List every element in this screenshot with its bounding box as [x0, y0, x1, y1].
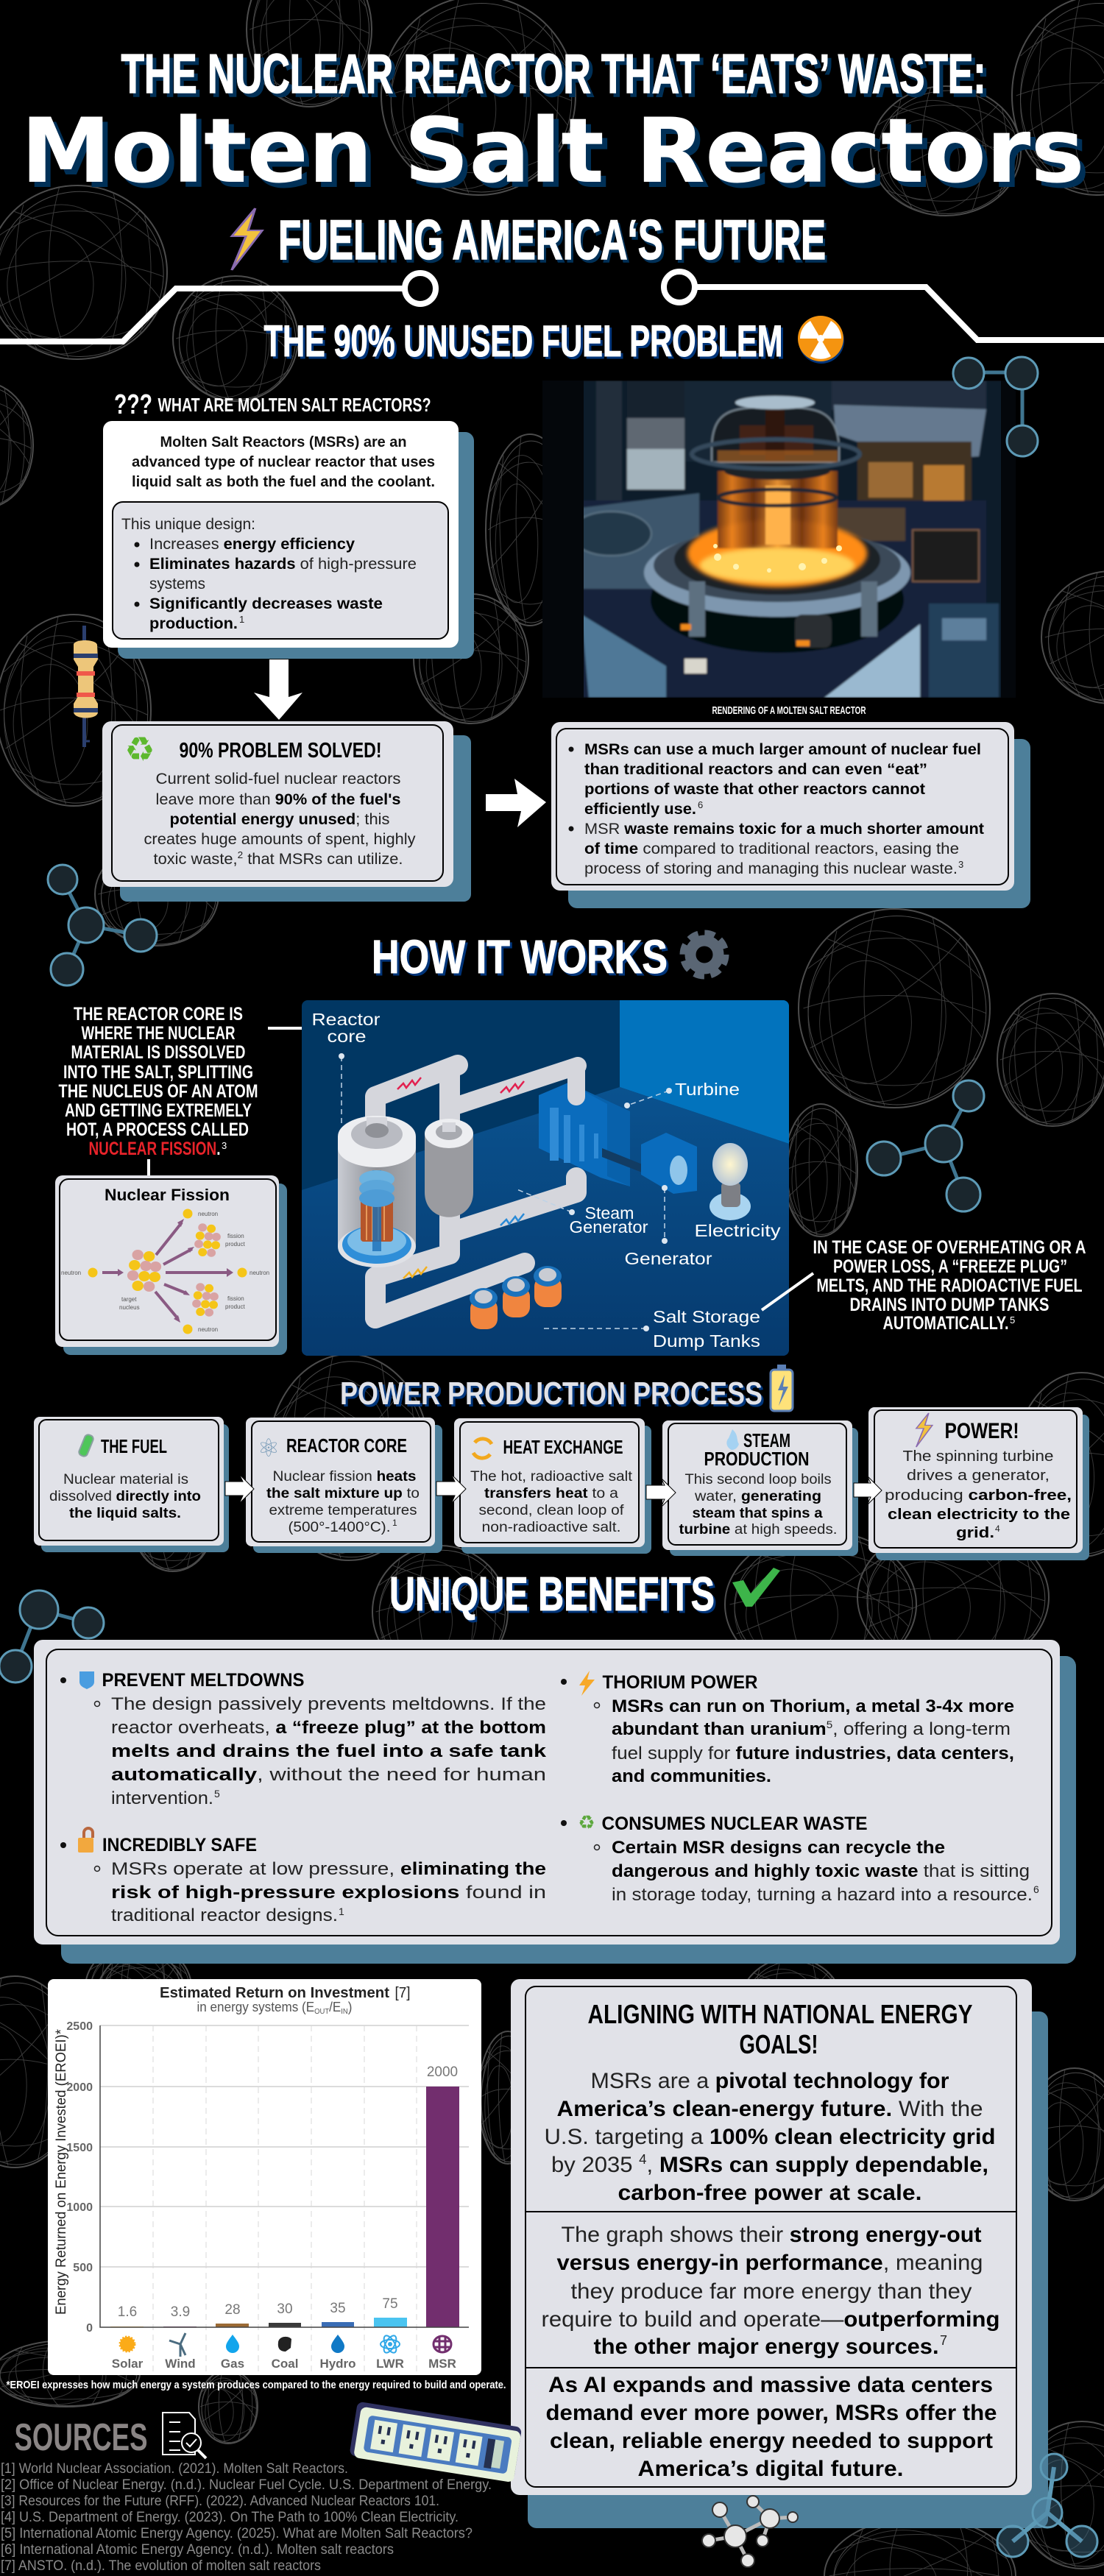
chart title: [7]: [394, 1985, 411, 2001]
goals paragraph 2: The graph shows their strong energy-out: [561, 2223, 982, 2247]
benefit: prevent meltdowns: The design passively prevents meltdowns. If the: [111, 1694, 546, 1714]
text: freeze plug explanation: AUTOMATICALLY.: [883, 1313, 1008, 1334]
body text: toxic waste,: [153, 851, 234, 868]
text: reactor core explanation: HOT, A PROCESS CALLED: [66, 1119, 249, 1140]
fuel text: the liquid salts.: [69, 1506, 181, 1521]
icon: gear: [683, 933, 726, 976]
inner box: unique design list: 1: [239, 614, 244, 625]
fission labels: neutron: [198, 1326, 218, 1333]
inner box: unique design list: Significantly decreases waste: [149, 595, 383, 612]
chart: reactor schematic: [302, 1000, 789, 1356]
fission labels: product: [225, 1241, 245, 1248]
schematic labels: Generator: [624, 1249, 712, 1268]
category labels: MSR: [428, 2357, 456, 2371]
molecule: white bottom: [702, 2496, 798, 2567]
fission title: Nuclear Fission: [105, 1186, 230, 1204]
image: reactor rendering: [542, 381, 1016, 698]
benefit: prevent meltdowns: intervention.: [111, 1788, 213, 1808]
value labels: 30: [277, 2301, 293, 2317]
schematic labels: [312, 1010, 781, 1351]
heading: 90% PROBLEM SOLVED!: [180, 739, 381, 762]
molecule: top right: [953, 357, 1038, 456]
icon: recycle: ♻: [124, 729, 155, 769]
goals paragraph 1: ,: [647, 2153, 659, 2177]
subtitle text: FUELING AMERICA‘S FUTURE: [278, 209, 826, 272]
icon: cycle: [473, 1439, 492, 1458]
schematic labels: Generator: [570, 1217, 648, 1236]
inner box: unique design list: systems: [149, 576, 205, 592]
text: reactor core explanation: INTO THE SALT, SPLITTING: [63, 1062, 253, 1083]
category labels: LWR: [376, 2357, 404, 2371]
advantages list: of time compared to traditional reactors, easing the: [584, 841, 959, 857]
heat exchange text: The hot, radioactive salt: [470, 1469, 633, 1485]
power text: grid.: [956, 1525, 994, 1541]
goals paragraph 2: 7: [940, 2333, 947, 2348]
body text: [144, 771, 416, 868]
footnote: EROEI: *EROEI expresses how much energy a system produces compared to the energy required to build and operate.: [6, 2379, 506, 2391]
glowing sparkles: [713, 544, 842, 573]
y axis labels: 2500: [66, 2020, 93, 2033]
reactor vessel: [338, 1116, 416, 1267]
caption: rendering: RENDERING OF A MOLTEN SALT REACTOR: [712, 704, 866, 717]
fission labels: neutron: [61, 1270, 81, 1276]
value labels: 1.6: [118, 2304, 137, 2320]
goals paragraph 1: [545, 2069, 995, 2205]
y axis labels: 1000: [66, 2201, 93, 2214]
text: freeze plug explanation: 5: [1010, 1314, 1015, 1326]
goals paragraph 3: America’s digital future.: [637, 2457, 904, 2481]
sources list: [1, 2461, 492, 2574]
y axis labels: 0: [86, 2322, 93, 2335]
chart title: /E: [329, 2000, 341, 2014]
icon: atom: ⚛: [258, 1434, 280, 1463]
text: reactor core explanation: AND GETTING EXTREMELY: [65, 1100, 252, 1121]
benefit: consumes nuclear waste: Certain MSR designs can recycle the: [612, 1838, 945, 1858]
benefit: prevent meltdowns: melts and drains the fuel into a safe tank: [111, 1741, 547, 1761]
y axis labels: 500: [73, 2262, 93, 2274]
benefit: thorium power: THORIUM POWER: [602, 1672, 758, 1693]
chart title: OUT: [314, 2008, 329, 2016]
benefit: incredibly safe: risk of high-pressure explosions found in: [111, 1883, 546, 1903]
pipes: [375, 1065, 578, 1318]
molecule: translucent bottom right: [997, 2454, 1097, 2557]
panel: MSR advantages: [551, 722, 1030, 908]
icon: resistor: [74, 626, 98, 747]
neutrons: [88, 1209, 247, 1334]
advantages list: 6: [698, 799, 703, 810]
icon: power strip: [349, 2402, 522, 2483]
heading: 90% unused fuel problem: THE 90% UNUSED FUEL PROBLEM: [263, 316, 783, 366]
power text: clean electricity to the: [888, 1507, 1070, 1523]
category labels: Coal: [272, 2357, 298, 2371]
fission labels: product: [225, 1303, 245, 1310]
chart title: [160, 1985, 411, 2016]
steam text: This second loop boils: [684, 1472, 832, 1487]
reactor core text: 1: [392, 1518, 397, 1528]
icon: lightning small: [916, 1413, 933, 1447]
category labels: Wind: [165, 2357, 196, 2371]
fission labels: nucleus: [119, 1304, 140, 1311]
body text: that MSRs can utilize.: [243, 851, 403, 868]
arrow: step 3 to 4: [646, 1478, 676, 1507]
reactor core text: extreme temperatures: [269, 1503, 417, 1518]
heading: what are MSRs: [114, 389, 431, 420]
y axis title: Energy Returned on Energy Invested (EROEI)*: [54, 2028, 69, 2315]
panel: nuclear fission diagram: [55, 1175, 287, 1355]
schematic labels: Salt Storage: [653, 1307, 760, 1326]
molecule: left benefits: [0, 1590, 104, 1682]
goals paragraph 1: by 2035: [551, 2153, 630, 2177]
fission arrows: [102, 1219, 233, 1323]
body text: 2: [238, 849, 243, 860]
sources list: [2] Office of Nuclear Energy. (n.d.). Nuclear Fuel Cycle. U.S. Department of Energy.: [1, 2477, 492, 2493]
goals paragraph 3: clean, reliable energy needed to support: [550, 2429, 993, 2453]
text: reactor core explanation: MATERIAL IS DISSOLVED: [71, 1042, 246, 1063]
arrow: step 2 to 3: [436, 1474, 466, 1504]
panel: unique benefits: [34, 1640, 1076, 1964]
advantages list: than traditional reactors and can even “eat”: [584, 761, 927, 778]
chart title: ): [348, 2000, 352, 2014]
inner box: unique design list: Increases energy efficiency: [149, 536, 355, 553]
goals paragraph 2: [542, 2223, 999, 2359]
panel: the fuel: THE FUEL: [101, 1435, 167, 1457]
axes: [100, 2025, 469, 2327]
panel: steam production step: STEAM: [743, 1429, 790, 1451]
advantages list: 3: [958, 859, 963, 870]
benefit: incredibly safe: 1: [339, 1906, 344, 1917]
goals paragraph 3: demand ever more power, MSRs offer the: [546, 2401, 997, 2425]
schematic labels: Electricity: [695, 1221, 781, 1240]
icon: checklist: [163, 2413, 206, 2458]
steam text: steam that spins a: [692, 1506, 823, 1521]
advantages list: MSR waste remains toxic for a much shorter amount: [584, 821, 984, 838]
gridlines: [100, 2025, 469, 2267]
inner box: unique design list: Eliminates hazards of high-pressure: [149, 556, 417, 573]
definition text: [132, 434, 435, 490]
fuel text: [49, 1472, 201, 1521]
goals paragraph 2: they produce far more energy than they: [571, 2279, 972, 2304]
value labels: [118, 2064, 458, 2320]
heat exchange text: non-radioactive salt.: [481, 1520, 621, 1535]
definition text: advanced type of nuclear reactor that uses: [132, 454, 435, 470]
reactor core text: [266, 1469, 420, 1535]
benefit: thorium power: [561, 1671, 1014, 1786]
heat exchange text: [470, 1469, 633, 1535]
panel: reactor core step: [246, 1418, 442, 1553]
icon: test tube: [78, 1434, 94, 1457]
heading text: WHAT ARE MOLTEN SALT REACTORS?: [158, 394, 431, 416]
body text: leave more than 90% of the fuel's: [156, 791, 400, 808]
reactor core text: Nuclear fission heats: [272, 1469, 417, 1485]
text: reactor core explanation: 3: [222, 1140, 227, 1151]
icon: steam: [726, 1429, 739, 1450]
inner box: unique design list: [113, 502, 448, 639]
body text: Current solid-fuel nuclear reactors: [156, 771, 400, 788]
heat exchange text: transfers heat to a: [484, 1486, 618, 1501]
benefit: incredibly safe: INCREDIBLY SAFE: [102, 1835, 257, 1855]
heat squiggles: [397, 1078, 524, 1278]
advantages list: portions of waste that other reactors cannot: [584, 781, 925, 798]
category labels: [112, 2357, 456, 2371]
goals paragraph 2: the other major energy sources.: [593, 2335, 939, 2359]
chart title: IN: [341, 2008, 348, 2016]
power text: [885, 1448, 1072, 1541]
benefit: incredibly safe: MSRs operate at low pressure, eliminating the: [111, 1859, 546, 1879]
steam generator vessel: [425, 1119, 473, 1217]
sources list: [1] World Nuclear Association. (2021). Molten Salt Reactors.: [1, 2461, 348, 2477]
value labels: 2000: [427, 2064, 458, 2080]
heading: unique benefits: UNIQUE BENEFITS: [389, 1567, 715, 1621]
benefit: prevent meltdowns: reactor overheats, a “freeze plug” at the bottom: [111, 1718, 546, 1738]
fission labels: fission: [227, 1295, 244, 1302]
text: reactor core explanation: NUCLEAR FISSION.: [88, 1139, 221, 1159]
power text: producing carbon-free,: [885, 1487, 1072, 1504]
molecule: right middle: [867, 1080, 984, 1211]
connector lines: [149, 1028, 306, 1178]
value labels: 35: [330, 2301, 346, 2316]
goals paragraph 3: [546, 2373, 997, 2481]
benefit: thorium power: , offering a long-term: [832, 1719, 1011, 1739]
goals heading: ALIGNING WITH NATIONAL ENERGY: [587, 1999, 973, 2029]
category icons: [120, 2333, 451, 2357]
title line 2: Molten Salt Reactors: [21, 99, 1085, 203]
connector: freeze plug: [762, 1273, 813, 1310]
y axis labels: 2000: [66, 2081, 93, 2094]
text: freeze plug explanation: [813, 1237, 1086, 1334]
dump tanks: [470, 1266, 562, 1329]
value labels: 3.9: [171, 2304, 190, 2320]
subtitle: [232, 208, 826, 272]
turbine block: [539, 1083, 697, 1194]
sources list: [3] Resources for the Future (RFF). (2022). Advanced Nuclear Reactors 101.: [1, 2494, 439, 2509]
arrow: step 4 to 5: [854, 1476, 882, 1505]
goals paragraph 1: 4: [639, 2152, 647, 2167]
sources list: [5] International Atomic Energy Agency. (2025). What are Molten Salt Reactors?: [1, 2526, 473, 2541]
benefit: incredibly safe: traditional reactor designs.: [111, 1906, 338, 1925]
power text: 4: [995, 1524, 1000, 1534]
panel: what are MSRs: [103, 421, 474, 659]
benefit: thorium power: abundant than uranium: [612, 1719, 827, 1739]
light bulb: [710, 1143, 751, 1220]
sources list: [6] International Atomic Energy Agency. (n.d.). Molten salt reactors: [1, 2542, 394, 2558]
benefit: consumes nuclear waste: 6: [1033, 1883, 1039, 1895]
goals paragraph 2: require to build and operate— outperforming: [542, 2307, 999, 2332]
goals heading: GOALS!: [739, 2029, 818, 2059]
inner box: unique design list: production.: [149, 615, 238, 632]
goals paragraph 1: MSRs can supply dependable,: [659, 2153, 988, 2177]
benefit: thorium power: fuel supply for future industries, data centers,: [612, 1744, 1014, 1763]
panel: power step: POWER!: [945, 1419, 1019, 1443]
sources list: [7] ANSTO. (n.d.). The evolution of molten salt reactors: [1, 2558, 321, 2574]
chart title: Estimated Return on Investment: [160, 1985, 389, 2001]
chart: estimated return on investment: [48, 1979, 481, 2375]
category labels: Hydro: [319, 2357, 356, 2371]
steam text: [679, 1472, 838, 1538]
arrow: step 1 to 2: [225, 1474, 254, 1504]
steam text: water, generating: [694, 1489, 821, 1504]
arrow: right: [486, 779, 546, 827]
text: reactor core explanation: THE REACTOR CORE IS: [74, 1004, 243, 1025]
benefit: incredibly safe: [60, 1828, 546, 1925]
heading: sources: SOURCES: [15, 2416, 147, 2459]
fuel text: dissolved directly into: [49, 1489, 201, 1504]
molecule: left lower: [48, 865, 157, 986]
schematic labels: Steam: [584, 1203, 634, 1222]
icon: radiation: [798, 316, 844, 364]
reactor core text: the salt mixture up to: [266, 1486, 420, 1501]
panel: steam production step: PRODUCTION: [704, 1448, 810, 1470]
definition text: liquid salt as both the fuel and the coolant.: [132, 474, 435, 490]
advantages list: process of storing and managing this nuclear waste.: [584, 860, 958, 877]
benefit: thorium power: MSRs can run on Thorium, a metal 3-4x more: [612, 1696, 1014, 1716]
leader dots and dashes: [342, 1056, 669, 1328]
benefit: consumes nuclear waste: ♻: [578, 1812, 595, 1834]
advantages list: efficiently use.: [584, 801, 696, 818]
sources list: [4] U.S. Department of Energy. (2023). On The Path to 100% Clean Electricity.: [1, 2510, 459, 2525]
steam text: turbine at high speeds.: [679, 1522, 838, 1538]
heading: power production process: [340, 1365, 793, 1412]
benefit: prevent meltdowns: 5: [214, 1788, 220, 1800]
icon: lightning: [232, 208, 262, 270]
power text: The spinning turbine: [902, 1448, 1054, 1465]
panel: power step: [868, 1407, 1089, 1560]
schematic labels: Turbine: [675, 1080, 740, 1099]
advantages list: [568, 741, 984, 877]
value labels: 75: [382, 2296, 398, 2312]
icon: check mark: [732, 1568, 780, 1607]
text: reactor core explanation: WHERE THE NUCLEAR: [81, 1023, 236, 1044]
category labels: Gas: [221, 2357, 244, 2371]
chart title: in energy systems (E: [197, 2000, 321, 2014]
panel: aligning with national energy goals: [511, 1979, 1048, 2528]
panel: heat exchange step: [454, 1418, 651, 1554]
benefit: consumes nuclear waste: CONSUMES NUCLEAR WASTE: [602, 1814, 867, 1834]
benefit: consumes nuclear waste: in storage today, turning a hazard into a resource.: [612, 1885, 1033, 1905]
heading: power production process: POWER PRODUCTION PROCESS: [340, 1376, 762, 1412]
text: freeze plug explanation: DRAINS INTO DUMP TANKS: [849, 1295, 1050, 1315]
goals heading: [587, 1999, 973, 2059]
body text: creates huge amounts of spent, highly: [144, 831, 416, 848]
heat exchange text: second, clean loop of: [478, 1503, 624, 1518]
schematic labels: Reactor: [312, 1010, 381, 1029]
fission labels: neutron: [250, 1270, 269, 1276]
circuit lines: [0, 272, 1104, 342]
y axis labels: 1500: [66, 2142, 93, 2154]
value labels: 28: [224, 2302, 241, 2318]
panel: 90% problem solved: [102, 721, 471, 902]
goals paragraph 1: carbon-free power at scale.: [618, 2181, 921, 2205]
goals paragraph 1: U.S. targeting a 100% clean electricity grid: [545, 2125, 995, 2149]
benefit: prevent meltdowns: PREVENT MELTDOWNS: [102, 1670, 305, 1691]
fission nuclei: [127, 1250, 161, 1292]
goals paragraph 2: versus energy-in performance , meaning: [556, 2251, 983, 2275]
panel: heat exchange step: HEAT EXCHANGE: [503, 1436, 623, 1458]
arrow: down: [254, 659, 302, 720]
goals paragraph 3: As AI expands and massive data centers: [548, 2373, 993, 2397]
heading: how it works: HOW IT WORKS: [372, 930, 668, 983]
fission labels: neutron: [198, 1211, 218, 1217]
text: reactor core explanation: [59, 1004, 258, 1159]
fission labels: [61, 1211, 269, 1333]
benefit: thorium power: 5: [827, 1719, 832, 1730]
fission labels: fission: [227, 1233, 244, 1239]
body text: potential energy unused ; this: [169, 811, 389, 828]
benefit: thorium power: and communities.: [612, 1766, 771, 1786]
icon: battery: [771, 1365, 793, 1411]
category labels: Solar: [112, 2357, 144, 2371]
benefit: consumes nuclear waste: [561, 1812, 1039, 1905]
schematic labels: Dump Tanks: [653, 1331, 760, 1351]
definition text: Molten Salt Reactors (MSRs) are an: [160, 434, 406, 450]
bars: [110, 2087, 459, 2327]
goals paragraph 1: America’s clean-energy future. With the: [556, 2097, 983, 2121]
reactor core text: (500°-1400°C).: [289, 1520, 390, 1535]
inner box: unique design list: This unique design:: [121, 516, 255, 533]
fission labels: target: [121, 1296, 137, 1303]
fuel text: Nuclear material is: [63, 1472, 188, 1487]
goals paragraph 1: MSRs are a pivotal technology for: [590, 2069, 949, 2093]
advantages list: MSRs can use a much larger amount of nuclear fuel: [584, 741, 981, 758]
icon: question marks: ???: [114, 389, 152, 420]
text: reactor core explanation: THE NUCLEUS OF AN ATOM: [59, 1081, 258, 1102]
benefit: prevent meltdowns: [60, 1670, 547, 1808]
schematic labels: core: [327, 1027, 367, 1046]
power text: drives a generator,: [907, 1468, 1050, 1484]
panel: steam production step: [662, 1420, 858, 1556]
benefit: consumes nuclear waste: dangerous and highly toxic waste that is sitting: [612, 1861, 1030, 1881]
panel: reactor core step: REACTOR CORE: [286, 1434, 407, 1457]
benefit: prevent meltdowns: automatically , without the need for human: [111, 1765, 546, 1785]
panel: the fuel: [34, 1417, 229, 1552]
y axis labels: [66, 2020, 93, 2335]
